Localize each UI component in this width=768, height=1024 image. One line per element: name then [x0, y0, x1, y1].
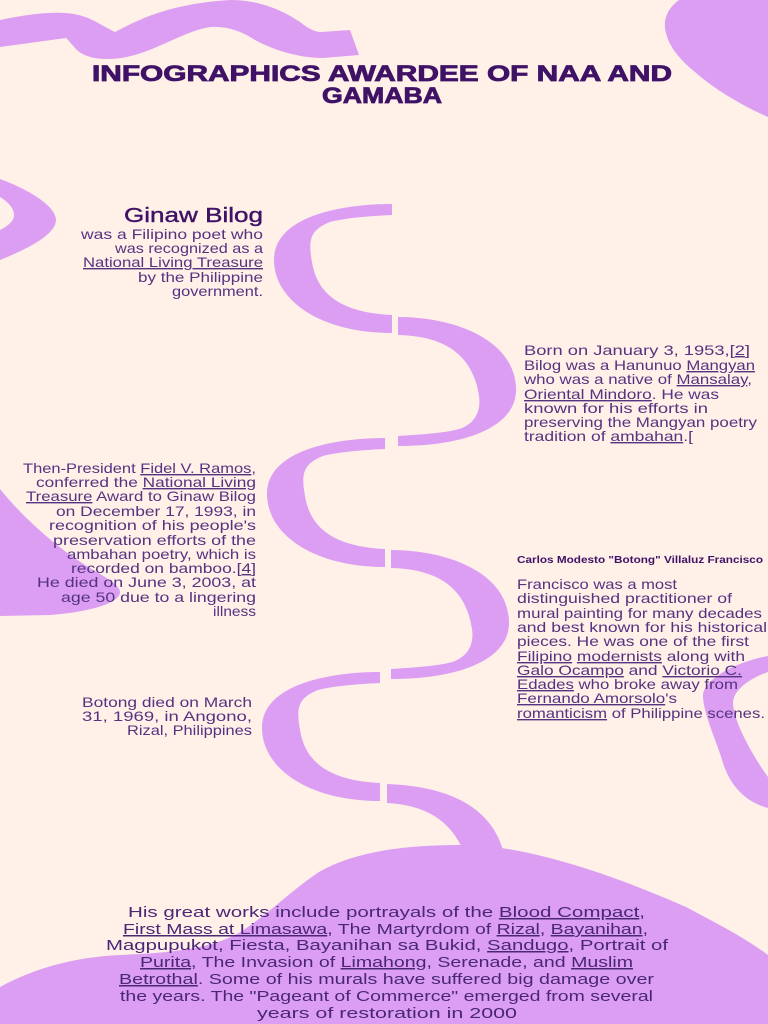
title — [92, 61, 672, 108]
text block: birth and background: who was a native of Mansalay , — [523, 371, 752, 387]
text block: award and death: Then-President Fidel V. Ramos , — [23, 460, 256, 476]
text block: birth and background: tradition of ambahan .[ — [524, 428, 693, 444]
text block: award and death: He died on June 3, 2003, at — [37, 574, 256, 590]
text block: great works: His great works include portrayals of the Blood Compact , — [128, 904, 645, 921]
text block: great works: the years. The "Pageant of Commerce" emerged from several — [120, 988, 653, 1005]
text block: award and death: age 50 due to a lingering — [61, 589, 256, 605]
heading: Carlos Modesto Botong Villaluz Francisco: Carlos Modesto "Botong" Villaluz Francisco — [517, 555, 763, 566]
heading: Ginaw Bilog: Ginaw Bilog — [124, 205, 263, 227]
timeline curve 3 — [267, 438, 385, 567]
text block: award and death: illness — [213, 603, 256, 619]
left upper ribbon — [0, 179, 56, 260]
text block: Francisco description: Filipino modernists along with — [517, 648, 745, 664]
text block: award and death: ambahan poetry, which is — [67, 546, 256, 562]
text block: award and death: preservation efforts of the — [53, 532, 256, 548]
text block: Ginaw Bilog intro: National Living Treasure — [83, 254, 263, 270]
text block: Botong death — [82, 694, 252, 738]
text block: Francisco description: Edades who broke away from — [517, 676, 738, 692]
text block: great works — [106, 904, 669, 1022]
text block: Ginaw Bilog intro — [80, 205, 263, 299]
text block: great works: Purita , The Invasion of Limahong , Serenade, and Muslim — [140, 954, 633, 971]
timeline curve 1 — [274, 204, 392, 333]
title: INFOGRAPHICS AWARDEE OF NAA AND — [92, 61, 672, 86]
text block: Francisco description — [517, 576, 767, 721]
timeline curve 5 — [262, 672, 380, 801]
text block: Francisco description: Fernando Amorsolo 's — [517, 690, 677, 706]
text block: Francisco description: Galo Ocampo and Victorio C. — [517, 662, 742, 678]
text block: Francisco description: and best known for his historical — [517, 619, 767, 635]
text block: birth and background: preserving the Mangyan poetry — [524, 414, 757, 430]
text block: Francisco description: romanticism of Philippine scenes. — [517, 705, 765, 721]
timeline curve 6 — [387, 784, 503, 850]
text block: great works: Betrothal . Some of his murals have suffered big damage over — [119, 971, 654, 988]
text block: Ginaw Bilog intro: government. — [172, 283, 263, 299]
text block: Francisco description: pieces. He was one of the first — [517, 633, 749, 649]
text block: Francisco description: distinguished practitioner of — [517, 590, 732, 606]
text block: Ginaw Bilog intro: was recognized as a — [114, 240, 263, 256]
left middle blob — [0, 489, 120, 616]
top right blob — [665, 0, 768, 117]
text block: award and death: Treasure Award to Ginaw Bilog — [26, 488, 256, 504]
text block: Ginaw Bilog intro: was a Filipino poet who — [80, 226, 263, 242]
text block: Francisco description: mural painting for many decades — [517, 605, 762, 621]
text block: award and death: on December 17, 1993, in — [56, 503, 256, 519]
bottom hill — [0, 845, 768, 1024]
text block: award and death: recorded on bamboo.[ 4] — [71, 560, 256, 576]
text block: birth and background: Bilog was a Hanunuo Mangyan — [524, 357, 755, 373]
text block: great works: First Mass at Limasawa , The Martyrdom of Rizal , Bayanihan , — [123, 921, 648, 938]
timeline curve 4 — [391, 550, 509, 679]
text block: birth and background — [523, 342, 757, 444]
text block: award and death: conferred the National Living — [36, 474, 256, 490]
text block: birth and background: Oriental Mindoro . He was — [524, 386, 719, 402]
text block: great works: Magpupukot, Fiesta, Bayanihan sa Bukid, Sandugo , Portrait of — [106, 937, 669, 954]
text block: Botong death: Rizal, Philippines — [127, 722, 252, 738]
top wave ribbon — [0, 0, 359, 59]
text block: birth and background: Born on January 3, 1953,[ 2] — [524, 342, 750, 358]
timeline curve 2 — [398, 317, 516, 446]
text block: Francisco description: Francisco was a most — [517, 576, 677, 592]
text block: Botong death: Botong died on March — [82, 694, 252, 710]
text block: birth and background: known for his efforts in — [524, 400, 708, 416]
text block: award and death: recognition of his people's — [49, 517, 256, 533]
text block: Botong death: 31, 1969, in Angono, — [82, 708, 252, 724]
text block: award and death — [23, 460, 256, 619]
right ribbon — [703, 656, 768, 808]
serpentine timeline — [262, 204, 516, 850]
text block: great works: years of restoration in 2000 — [257, 1005, 517, 1022]
text block: Ginaw Bilog intro: by the Philippine — [138, 269, 263, 285]
title: GAMABA — [322, 83, 442, 108]
